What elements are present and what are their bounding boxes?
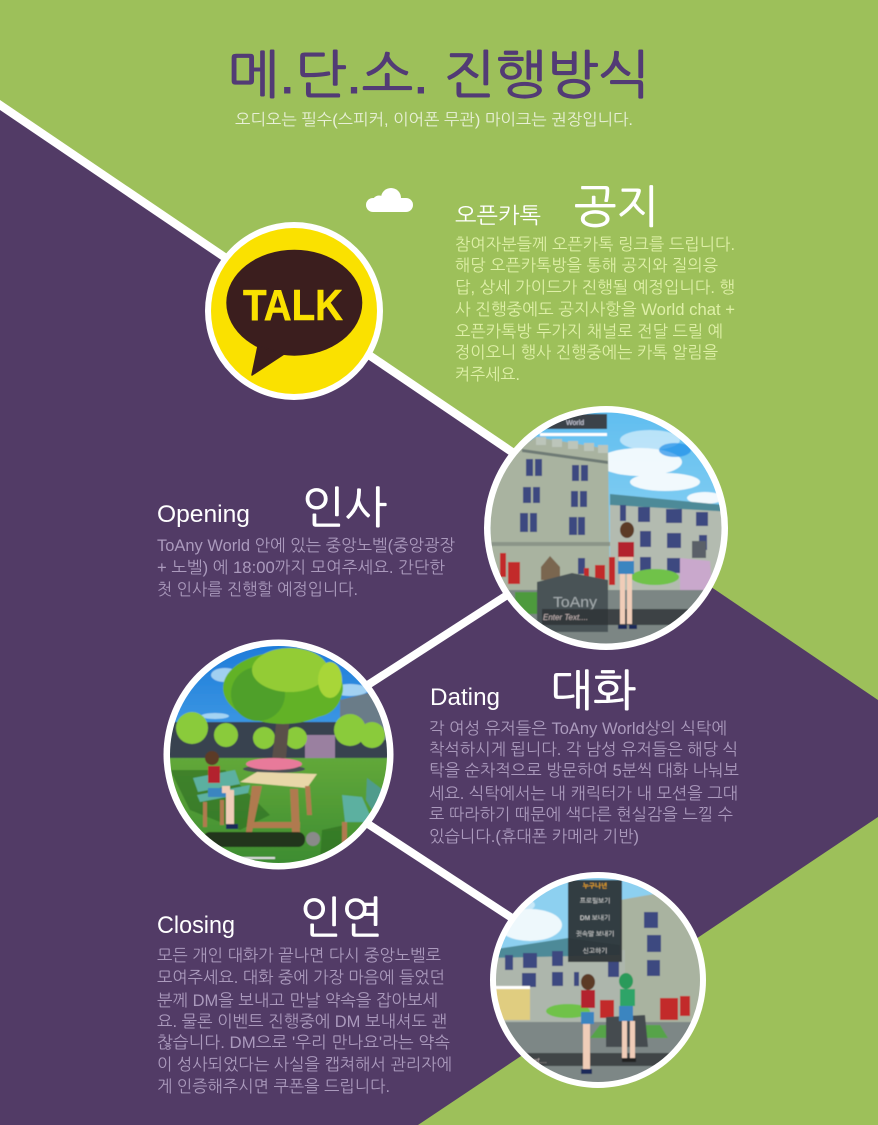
text block: dating: 착석하시게 됩니다. 각 남성 유저들은 해당 식: [429, 741, 738, 759]
buildings: [160, 722, 400, 760]
seated character: [205, 751, 238, 829]
beige building: [496, 988, 530, 1020]
photo: opening plaza: Enter Text....: [543, 613, 588, 622]
photo: profile menu: 귓속말 보내기: [576, 930, 614, 938]
text block: notice: 참여자분들께 오픈카톡 링크를 드립니다.: [455, 236, 735, 254]
text block: closing: Closing: [157, 912, 235, 939]
text block: closing: [157, 894, 452, 1096]
photo: profile menu: 신고하기: [583, 947, 607, 955]
characters: [581, 974, 595, 1074]
flower bed: [243, 765, 305, 773]
text block: dating: Dating: [430, 684, 500, 711]
text block: notice: 오픈카톡방 두가지 채널로 전달 드릴 예: [455, 323, 723, 341]
title: 메.단.소. 진행방식: [228, 47, 650, 105]
photo: opening plaza: [484, 405, 735, 650]
plinth: [537, 573, 608, 632]
text block: dating: 탁을 순차적으로 방문하여 5분씩 대화 나눠보: [429, 762, 739, 780]
text block: notice: 정이오니 행사 진행중에는 카톡 알림을: [455, 344, 718, 362]
text block: closing: 모든 개인 대화가 끝나면 다시 중앙노벨로: [157, 947, 441, 965]
text input bar: [542, 609, 702, 625]
wing: [609, 504, 722, 591]
text block: notice: 답, 상세 가이드가 진행될 예정입니다. 행: [455, 279, 735, 297]
castle: [621, 894, 700, 1022]
ground: [170, 757, 387, 863]
text block: closing: 모여주세요. 대화 중에 가장 마음에 들었던: [157, 969, 445, 987]
icon: KakaoTalk badge: TALK: [243, 281, 343, 330]
text block: opening: ToAny World 안에 있는 중앙노벨(중앙광장: [157, 537, 455, 555]
table: [240, 772, 317, 788]
text block: closing: 이 성사되었다는 사실을 캡쳐해서 관리자에: [157, 1056, 452, 1074]
text block: opening: 첫 인사를 진행할 예정입니다.: [157, 581, 358, 599]
ground: [508, 590, 704, 644]
character: [618, 522, 637, 629]
text block: opening: [157, 484, 455, 599]
text block: opening: 인사: [302, 484, 387, 533]
photo: profile menu: ext....: [530, 1058, 547, 1065]
photo: profile menu: DM 보내기: [580, 914, 610, 922]
left bench: [193, 770, 250, 827]
text block: notice: 공지: [574, 182, 659, 232]
main tree: [272, 724, 290, 759]
photo: park table: [160, 635, 400, 873]
text block: closing: 찮습니다. DM으로 '우리 만나요'라는 약속: [157, 1034, 450, 1052]
photo: opening plaza: ToAny: [553, 594, 598, 611]
text block: notice: 해당 오픈카톡방을 통해 공지와 질의응: [455, 257, 718, 275]
photo: profile menu: [490, 870, 710, 1092]
connector: top diagonal line: [0, 102, 515, 454]
icon: KakaoTalk badge: [205, 222, 383, 400]
connector: line to closing photo: [365, 822, 515, 920]
banners: [500, 553, 615, 585]
text block: closing: 분께 DM을 보내고 만날 약속을 잡아보세: [157, 992, 438, 1010]
text block: notice: 사 진행중에도 공지사항을 World chat +: [455, 301, 735, 319]
text block: dating: 로 따라하기 때문에 색다른 현실감을 느낄 수: [429, 806, 733, 824]
windows: [520, 459, 708, 574]
text block: closing: 인연: [300, 894, 383, 943]
pedestal: [680, 558, 712, 590]
text block: dating: 대화: [550, 667, 636, 716]
text input bar: [526, 1052, 670, 1066]
subtitle: 오디오는 필수(스피커, 이어폰 무관) 마이크는 권장입니다.: [235, 111, 633, 129]
text block: opening: + 노벨) 에 18:00까지 모여주세요. 간단한: [157, 559, 445, 577]
right bench: [341, 778, 382, 843]
photo: opening plaza: World: [566, 420, 584, 427]
text block: dating: 세요. 식탁에서는 내 캐릭터가 내 모션을 그대: [429, 785, 738, 803]
background trees: [176, 712, 385, 749]
menu: [568, 880, 622, 962]
text block: dating: [429, 667, 739, 846]
text block: notice: 오픈카톡: [455, 203, 541, 228]
ground: [505, 1022, 691, 1082]
photo: profile menu: 누구나년: [583, 882, 607, 890]
text block: notice: 켜주세요.: [455, 366, 520, 384]
keep: [490, 437, 610, 595]
text block: dating: 각 여성 유저들은 ToAny World상의 식탁에: [429, 720, 727, 738]
photo: profile menu: 프로필보기: [580, 897, 610, 905]
text block: closing: 요. 물론 이벤트 진행중에 DM 보내셔도 괜: [157, 1013, 447, 1031]
text block: closing: 게 인증해주시면 쿠폰을 드립니다.: [157, 1078, 390, 1096]
text block: dating: 있습니다.(휴대폰 카메라 기반): [429, 828, 639, 846]
connector: line to dating photo: [360, 590, 515, 690]
text block: opening: Opening: [157, 501, 250, 528]
icon: cloud: [366, 188, 413, 212]
text block: notice: [455, 182, 735, 384]
